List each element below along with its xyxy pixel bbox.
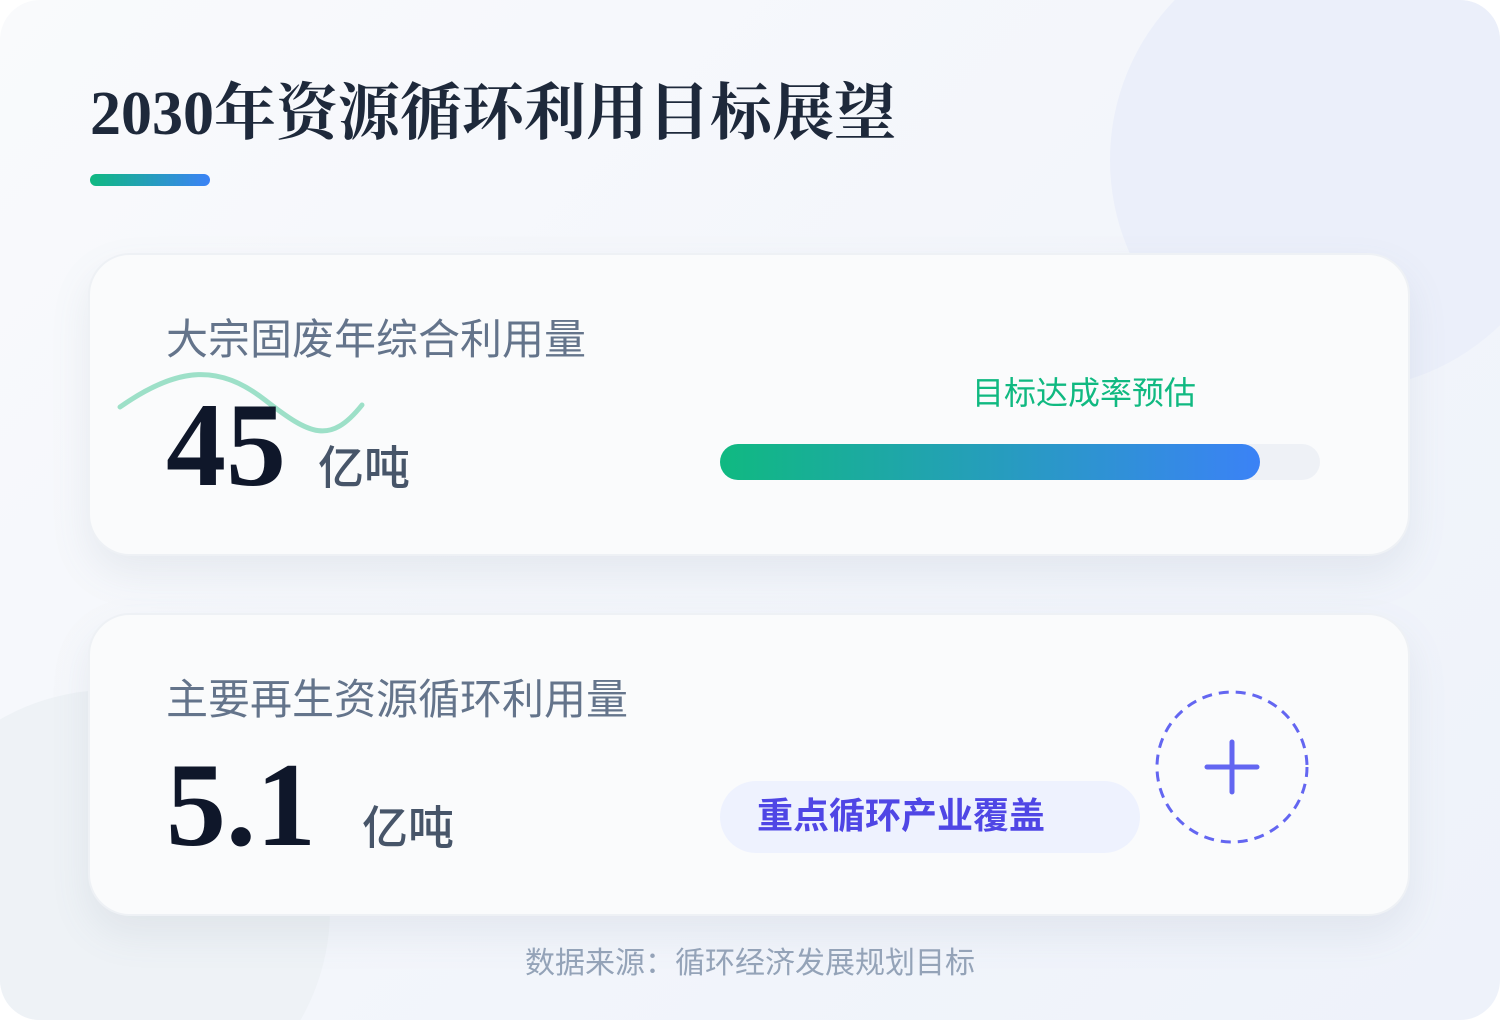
- decorative circle bottom left: [0, 690, 330, 1020]
- icon: dashed plus circle: [1156, 690, 1308, 844]
- title: 2030年资源循环利用目标展望: [90, 80, 896, 148]
- wave decoration: [118, 372, 364, 434]
- unit: 亿吨: [362, 802, 454, 854]
- footer source: 数据来源：循环经济发展规划目标: [525, 947, 975, 980]
- unit: 亿吨: [318, 442, 410, 494]
- label: 主要再生资源循环利用量: [166, 676, 628, 723]
- decorative circle top right: [1110, 0, 1500, 180]
- pill tag: [720, 781, 1140, 853]
- panel: renewable resources: [88, 613, 1410, 916]
- label: 大宗固废年综合利用量: [166, 316, 586, 363]
- progress label: 目标达成率预估: [972, 375, 1196, 411]
- title underline: [90, 174, 210, 186]
- pill tag: 重点循环产业覆盖: [757, 795, 1045, 836]
- number 45: 45: [166, 378, 286, 511]
- progress bar: [720, 444, 1320, 480]
- panel: bulk solid waste: [88, 253, 1410, 556]
- number 5.1: 5.1: [166, 738, 316, 871]
